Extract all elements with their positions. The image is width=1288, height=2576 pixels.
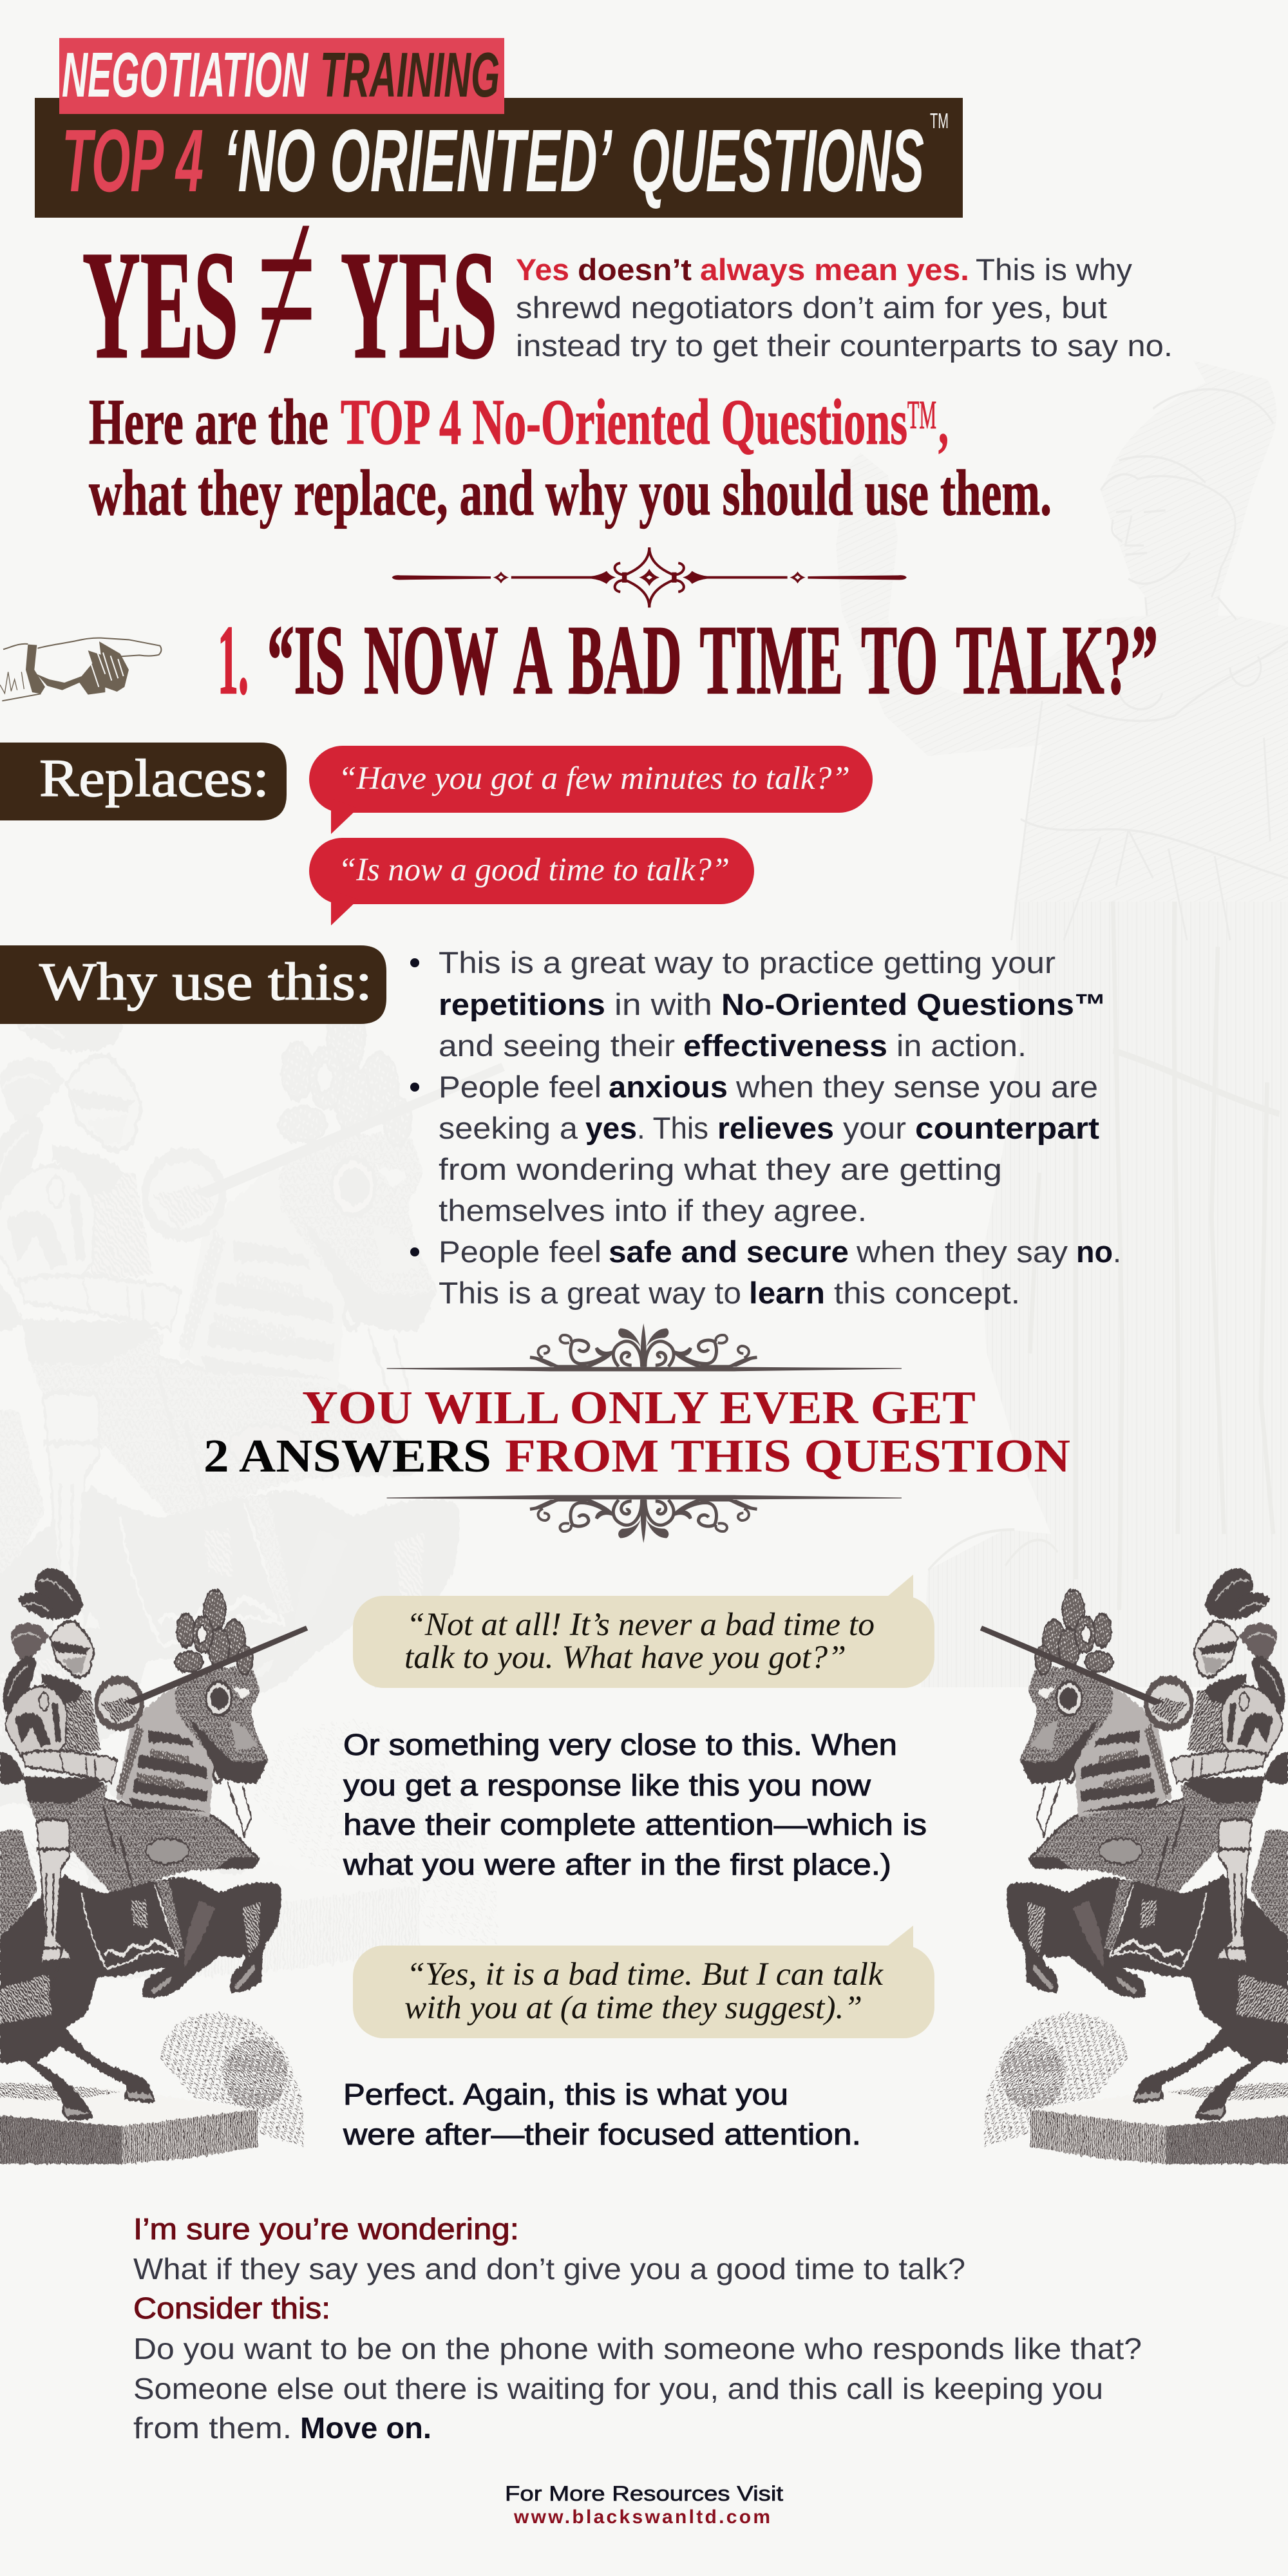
ornament: bottom flourish	[387, 1495, 902, 1543]
question heading: 1.	[218, 606, 249, 715]
bullet list: and seeing their	[439, 1028, 675, 1063]
intro paragraph: This is why	[976, 252, 1133, 287]
bullet list: when they say	[856, 1235, 1068, 1269]
illustration: left knight	[0, 1568, 308, 2164]
intro paragraph: Yes	[516, 252, 569, 287]
header tag: negotiation training: TRAINING	[320, 39, 500, 110]
subheading: TOP 4 No-Oriented Questions	[341, 386, 907, 458]
headline: yes does not equal yes: ≠	[258, 155, 316, 422]
bullet list: This is a great way to practice getting your	[439, 945, 1056, 980]
answer bubble: yes it is a bad time: with you at (a time they suggest).”	[404, 1990, 862, 2026]
explanation text one: what you were after in the first place.)	[343, 1848, 891, 1881]
intro paragraph	[516, 252, 1173, 363]
header banner: top 4 no oriented questions: TM	[930, 109, 949, 133]
closing note: from them.	[133, 2411, 292, 2445]
bullet list: .	[1113, 1235, 1121, 1269]
explanation text one: have their complete attention—which is	[343, 1808, 927, 1841]
bullet list: safe and secure	[609, 1235, 849, 1269]
bullet list: when they sense you are	[735, 1070, 1098, 1104]
answer bubble: yes it is a bad time: “Yes, it is a bad time. But I can talk	[406, 1956, 884, 1993]
bullet list: This is a great way to	[439, 1276, 741, 1310]
statue head	[1101, 361, 1276, 616]
bullet list: from wondering what they are getting	[439, 1152, 1002, 1186]
speech bubble: have you got a few minutes	[309, 746, 873, 834]
intro paragraph: always mean yes.	[700, 252, 969, 287]
icon: pointing hand	[0, 638, 162, 701]
bullet list	[410, 945, 1121, 1310]
ornament: red divider	[392, 547, 907, 607]
explanation text one: Or something very close to this. When	[343, 1728, 897, 1761]
label: why use this	[0, 945, 386, 1024]
headline: yes does not equal yes: YES	[82, 219, 238, 390]
ornament: top flourish	[387, 1323, 902, 1371]
intro paragraph: instead try to get their counterparts to say no.	[516, 328, 1173, 363]
intro paragraph: shrewd negotiators don’t aim for yes, but	[516, 290, 1107, 325]
bullet list: effectiveness	[683, 1028, 887, 1063]
subheading: TM	[907, 393, 936, 437]
bullet list: People feel	[439, 1070, 601, 1104]
closing note: Do you want to be on the phone with someone who responds like that?	[133, 2332, 1142, 2365]
bullet list: in action.	[896, 1028, 1027, 1063]
bullet list: People feel	[439, 1235, 601, 1269]
bullet list: themselves into if they agree.	[439, 1193, 867, 1227]
bullet list: repetitions	[439, 987, 605, 1021]
bullet list: . This	[637, 1111, 708, 1145]
bullet list: seeking a	[439, 1111, 578, 1145]
speech bubble: is now a good time: “Is now a good time to talk?”	[338, 852, 730, 888]
footer: resources link: www.blackswanltd.com	[513, 2506, 770, 2528]
explanation text two: were after—their focused attention.	[343, 2117, 861, 2151]
explanation text one	[343, 1728, 927, 1881]
section heading: two answers: YOU WILL ONLY EVER GET	[302, 1381, 976, 1434]
bullet list: in with	[614, 987, 712, 1021]
speech bubble: have you got a few minutes: “Have you got a few minutes to talk?”	[338, 761, 850, 797]
statue lower robe	[921, 902, 1288, 1687]
section heading: two answers: FROM THIS QUESTION	[505, 1430, 1070, 1482]
explanation text one: you get a response like this you now	[343, 1768, 871, 1802]
answer bubble: not at all: “Not at all! It’s never a bad time to	[406, 1607, 875, 1643]
watermark: faint knight	[0, 965, 505, 1978]
answer bubble: not at all: talk to you. What have you got?”	[404, 1640, 846, 1676]
bullet list: relieves	[717, 1111, 834, 1145]
closing note: Move on.	[300, 2411, 431, 2445]
illustration: right knight	[980, 1568, 1288, 2164]
label: why use this: Why use this:	[39, 952, 372, 1011]
watermark: statue of Athena	[836, 361, 1288, 1687]
closing note: Consider this:	[133, 2291, 330, 2325]
footer: resources link	[505, 2482, 783, 2528]
header banner: top 4 no oriented questions	[35, 38, 963, 218]
explanation text two	[343, 2078, 861, 2151]
closing note: Someone else out there is waiting for you, and this call is keeping you	[133, 2372, 1103, 2405]
section heading: two answers: 2 ANSWERS	[204, 1430, 491, 1482]
subheading: Here are the	[89, 386, 328, 458]
speech bubble: is now a good time	[309, 838, 754, 925]
footer: resources link: For More Resources Visit	[505, 2482, 783, 2505]
closing note: What if they say yes and don’t give you a good time to talk?	[133, 2252, 965, 2286]
explanation text two: Perfect. Again, this is what you	[343, 2078, 788, 2111]
closing note: I’m sure you’re wondering:	[133, 2212, 519, 2246]
header tag: negotiation training: NEGOTIATION	[62, 39, 308, 110]
bullet list: this concept.	[834, 1276, 1020, 1310]
bullet list: no	[1076, 1235, 1113, 1269]
bullet list: your	[843, 1111, 906, 1145]
bullet list: learn	[749, 1276, 825, 1310]
bullet list: yes	[585, 1111, 637, 1145]
headline: yes does not equal yes: YES	[341, 219, 497, 390]
bullet list: No-Oriented Questions™	[721, 987, 1106, 1021]
statue arm and torso	[836, 453, 1288, 902]
header banner: top 4 no oriented questions: QUESTIONS	[631, 111, 924, 211]
label: replaces: Replaces:	[39, 748, 269, 808]
subheading: ,	[938, 386, 949, 458]
closing note	[133, 2212, 1142, 2445]
header banner: top 4 no oriented questions: ‘NO ORIENTED’	[223, 111, 612, 211]
bullet list: anxious	[609, 1070, 728, 1104]
intro paragraph: doesn’t	[578, 252, 692, 287]
headline: yes does not equal yes	[82, 155, 497, 422]
answer bubble: yes it is a bad time	[353, 1926, 934, 2038]
bullet list: counterpart	[915, 1111, 1099, 1145]
subheading	[89, 386, 1052, 529]
header banner: top 4 no oriented questions: TOP 4	[62, 111, 204, 211]
section heading: two answers	[204, 1381, 1070, 1482]
answer bubble: not at all	[353, 1575, 934, 1688]
label: replaces	[0, 743, 287, 820]
